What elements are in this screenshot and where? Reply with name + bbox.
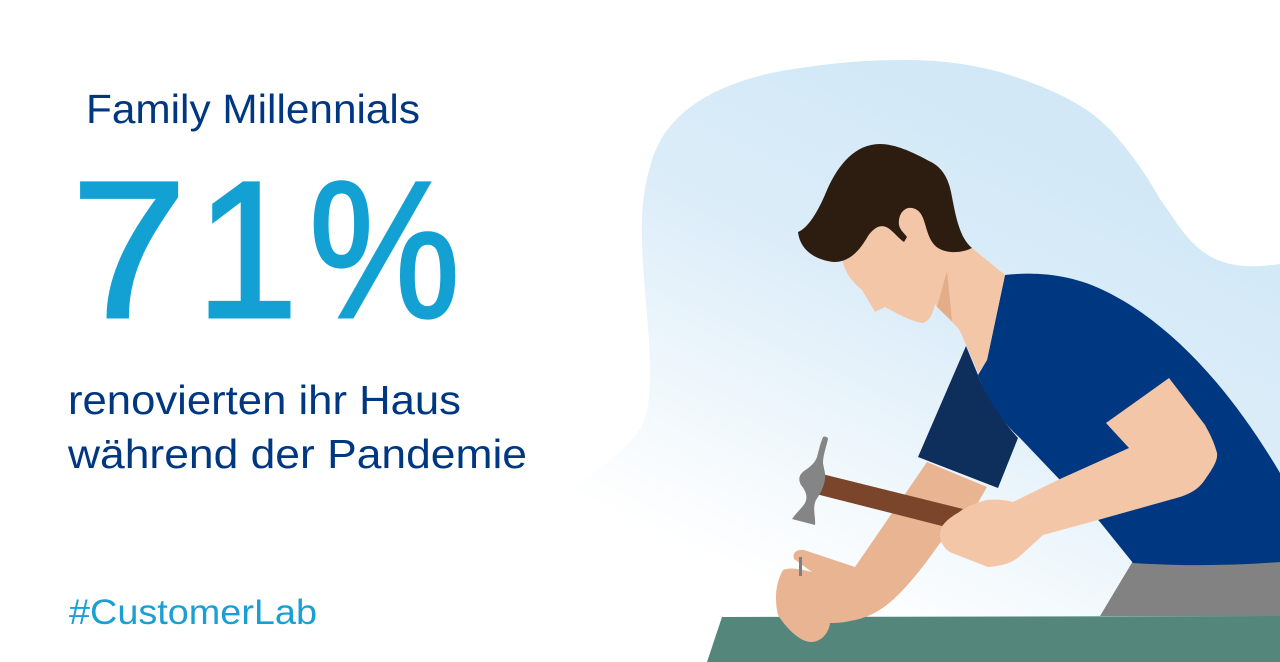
hashtag: CustomerLab: #CustomerLab — [69, 593, 317, 632]
description text: während der Pandemie — [67, 431, 527, 477]
statistic: 71% — [71, 141, 460, 359]
description text — [67, 377, 527, 477]
neck shadow — [937, 271, 952, 321]
nail — [799, 557, 802, 576]
trousers — [1100, 560, 1280, 616]
background blob — [515, 60, 1280, 662]
illustration: man hammering a nail — [707, 144, 1280, 662]
table — [707, 616, 1280, 662]
statistic: 71%: 7 — [71, 141, 187, 359]
heading: Family Millennials: Family Millennials — [86, 86, 420, 132]
hammer head — [792, 437, 828, 525]
hammer handle — [816, 474, 963, 526]
face and neck — [840, 206, 1005, 373]
statistic: 71%: % — [309, 141, 460, 359]
description text: renovierten ihr Haus — [68, 377, 461, 423]
hair — [798, 144, 972, 262]
far arm holding the nail — [776, 462, 987, 642]
near arm and hand — [940, 378, 1217, 567]
shirt — [978, 274, 1280, 565]
dark shirt sleeve — [918, 346, 1018, 488]
statistic: 71%: 1 — [196, 141, 298, 359]
